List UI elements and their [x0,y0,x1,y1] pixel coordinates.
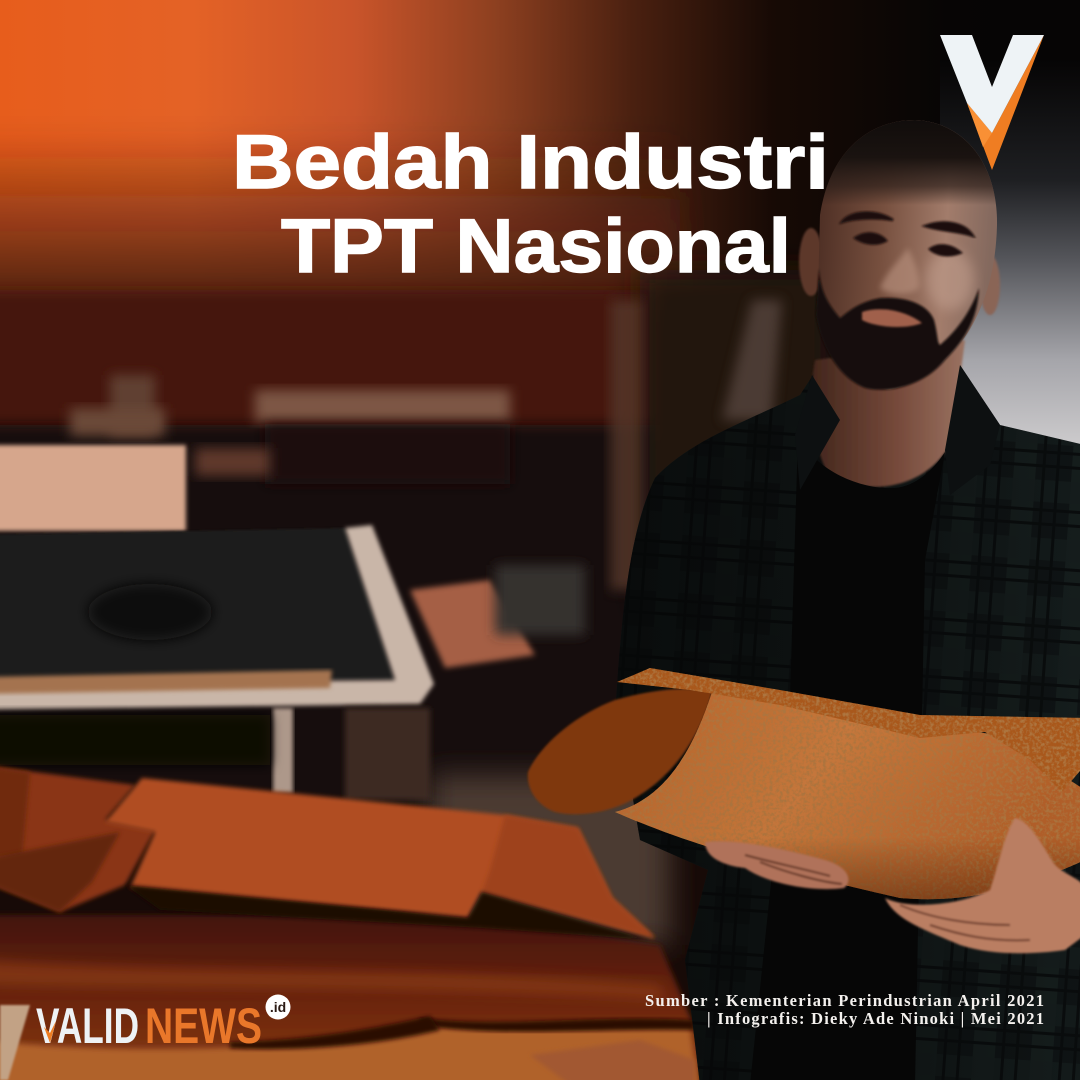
blurred workshop furniture [0,375,585,800]
background wall on the right [940,60,1080,460]
V mark white body [940,35,1044,133]
roll inner opening [528,689,712,814]
roll underside shadow [615,692,1080,899]
bald scalp shadow [824,120,996,203]
neck [812,340,965,487]
credit line: | Infografis: Dieky Ade Ninoki | Mei 2021 [707,1009,1044,1028]
shirt shadow [616,365,1080,1080]
id badge: .id [270,999,286,1015]
leather roll [528,668,1080,899]
black t-shirt [750,436,945,1080]
cheek light [926,250,974,310]
right hand [885,818,1080,953]
wordmark orange: NEWS [145,998,262,1054]
palm and fingers [705,841,848,889]
wordmark white: VALID [36,998,139,1054]
title line 1: Bedah Industri [232,120,829,205]
plaid shirt [616,365,1080,1080]
left hand [705,841,848,889]
roll body [615,692,1080,899]
V accent [44,1021,56,1043]
beard [816,268,979,390]
title [232,120,829,289]
V mark orange underside [967,35,1044,170]
lips [862,309,922,327]
logo: V mark [940,35,1044,170]
finger creases [745,855,842,884]
leather on the work table [0,765,700,1080]
ears [799,228,823,296]
logo: Validnews.id [36,994,290,1054]
person holding a leather roll [528,110,1080,1080]
palm and thumb [885,818,1080,953]
eyebrows [842,213,973,236]
shirt collar [795,365,1000,495]
head [818,120,997,390]
top leather flap [617,668,1080,792]
id badge [266,994,290,1020]
title line 2: TPT Nasional [281,204,791,289]
finger creases [900,905,1030,940]
eyes [853,232,963,256]
V mark light orange facet [967,103,992,147]
nose highlight [880,248,919,294]
source line: Sumber : Kementerian Perindustrian April 2021 [645,991,1044,1010]
source credits [645,991,1044,1028]
